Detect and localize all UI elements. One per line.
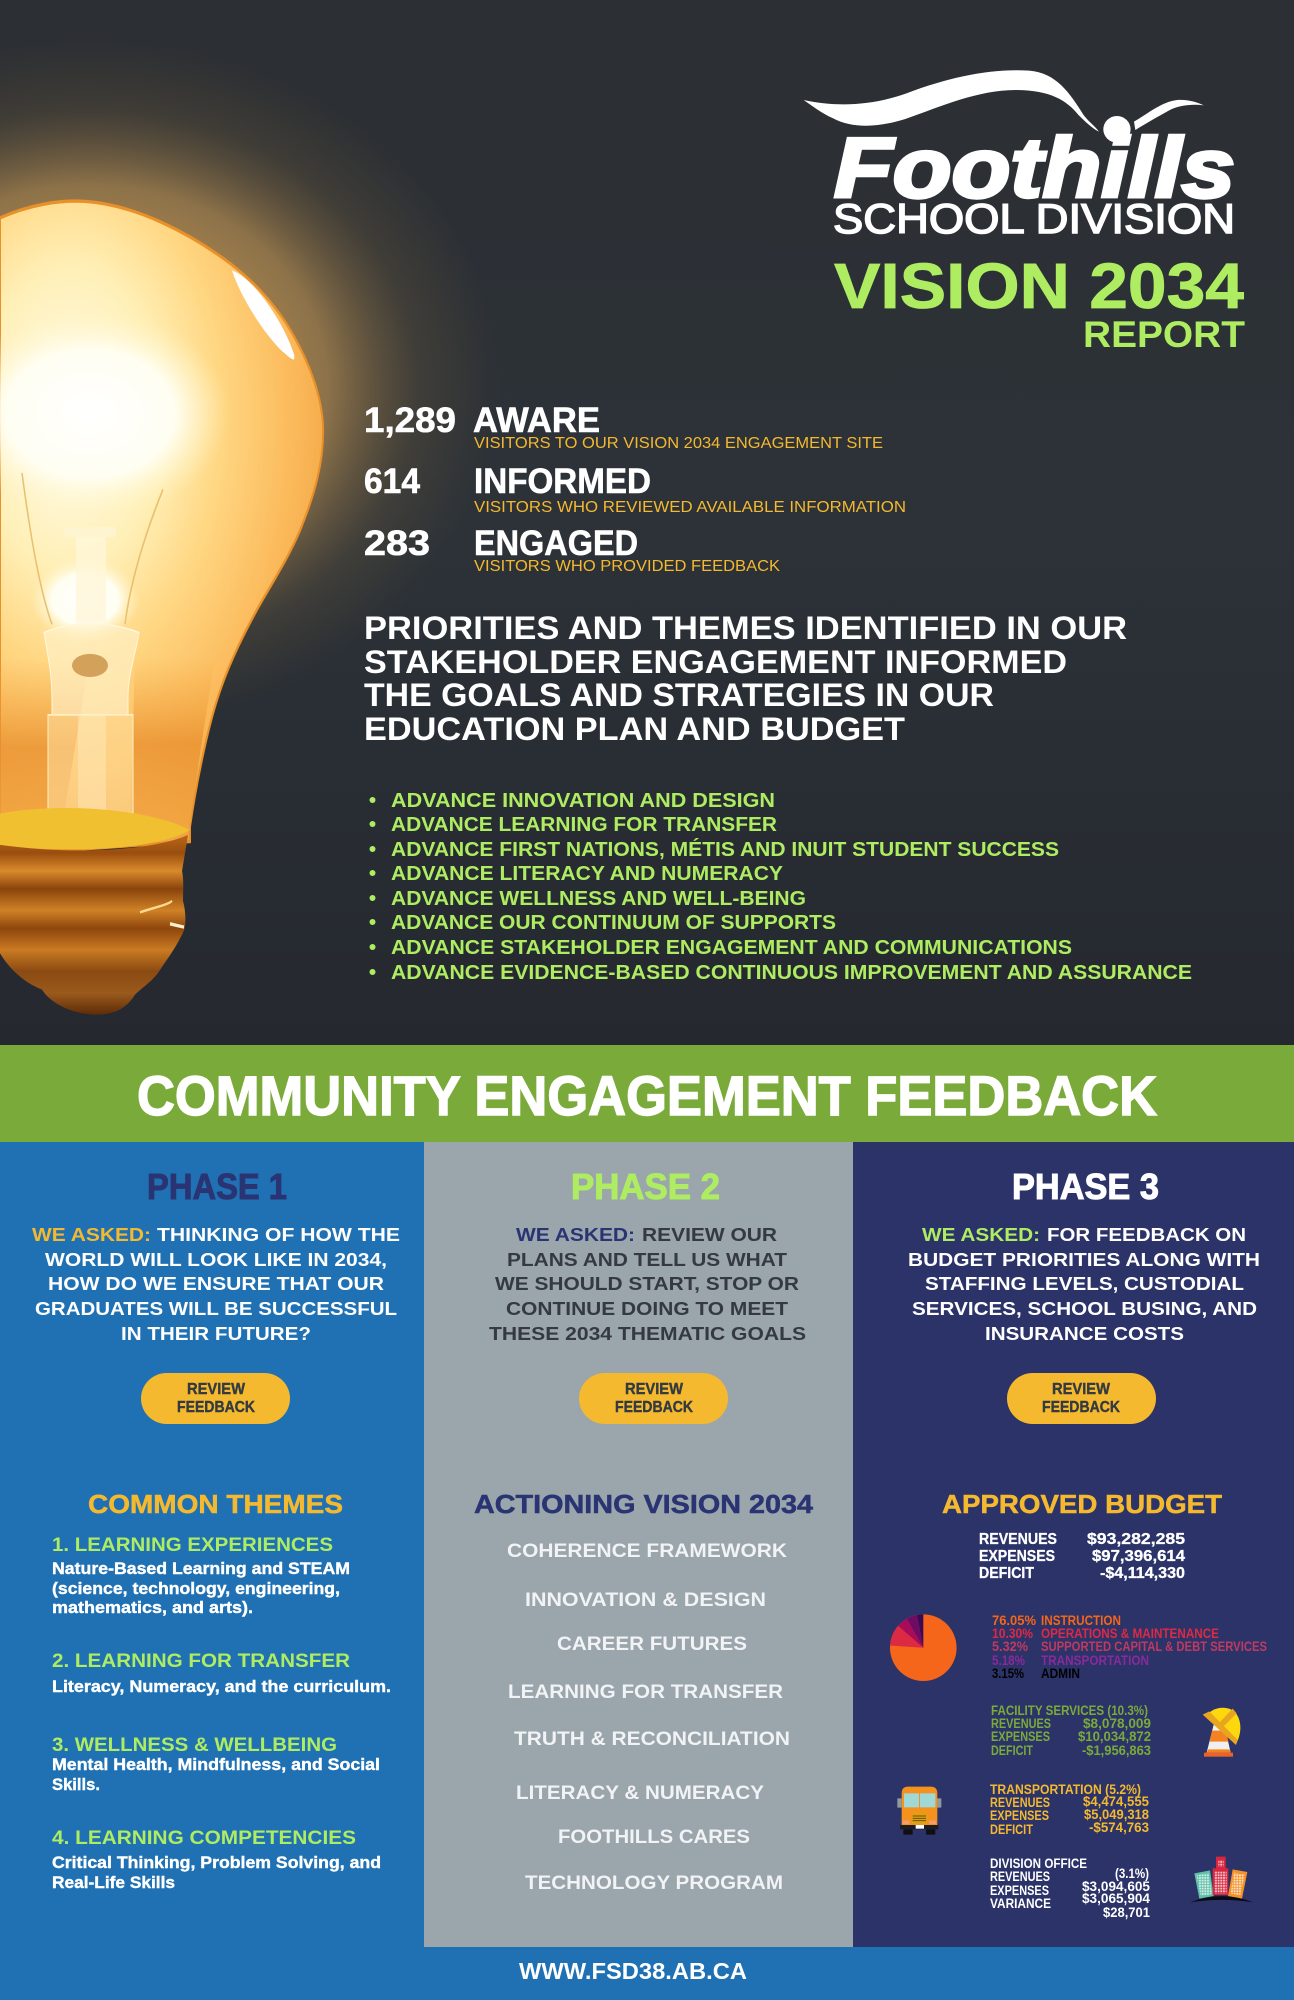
legend: budget allocation: 3.15% [992, 1666, 1024, 1681]
heading: priorities and themes: STAKEHOLDER ENGAGEMENT INFORMED [364, 644, 1067, 680]
title: Vision 2034: VISION 2034 [834, 250, 1244, 322]
theme 1 [52, 1535, 350, 1617]
theme 1: mathematics, and arts). [52, 1598, 253, 1617]
list: vision 2034 actions: INNOVATION & DESIGN [525, 1590, 766, 1611]
pie chart: budget allocation [890, 1614, 957, 1681]
table: division office: (3.1%) [1115, 1866, 1149, 1881]
stat: informed [364, 462, 906, 516]
text: phase 2 question: REVIEW OUR [642, 1224, 777, 1245]
legend: budget allocation: OPERATIONS & MAINTENANCE [1041, 1626, 1219, 1641]
text: phase 3 question: BUDGET PRIORITIES ALONG WITH [908, 1249, 1260, 1270]
theme 3: Skills. [52, 1775, 100, 1794]
theme 1: (science, technology, engineering, [52, 1579, 340, 1598]
list: vision 2034 actions: COHERENCE FRAMEWORK [507, 1541, 787, 1562]
legend: budget allocation: 5.32% [992, 1639, 1028, 1654]
table: division office: VARIANCE [990, 1896, 1051, 1911]
list: advance priorities: ADVANCE WELLNESS AND WELL-BEING [391, 888, 806, 910]
panel: phase 1 [0, 1142, 424, 1948]
theme 4: Real-Life Skills [52, 1873, 175, 1892]
table: transportation: TRANSPORTATION (5.2%) [990, 1782, 1141, 1797]
list: advance priorities: ADVANCE LITERACY AND NUMERACY [391, 863, 784, 885]
text: phase 2 question: WE ASKED: [516, 1224, 635, 1245]
theme 4: 4. LEARNING COMPETENCIES [52, 1828, 356, 1849]
heading: priorities and themes: PRIORITIES AND THEMES IDENTIFIED IN OUR [364, 610, 1127, 646]
logo wordmark: Foothills [834, 121, 1235, 215]
heading: actioning vision 2034: ACTIONING VISION 2034 [474, 1489, 814, 1519]
button: review feedback [141, 1373, 290, 1424]
text: phase 2 question: CONTINUE DOING TO MEET [506, 1298, 789, 1319]
button: review feedback: REVIEW [625, 1381, 684, 1398]
text: phase 3 question: STAFFING LEVELS, CUSTODIAL [925, 1273, 1244, 1294]
stat: engaged: ENGAGED [474, 524, 638, 563]
table: transportation: EXPENSES [990, 1808, 1049, 1823]
table: facility services: DEFICIT [991, 1743, 1034, 1758]
table: budget totals [979, 1531, 1185, 1582]
theme 3 [52, 1735, 380, 1794]
stat: engaged [364, 524, 780, 575]
list: advance priorities: ADVANCE INNOVATION AND DESIGN [391, 790, 775, 812]
stats: engagement numbers [364, 401, 906, 575]
table: facility services: REVENUES [991, 1716, 1051, 1731]
table: division office: DIVISION OFFICE [990, 1856, 1087, 1871]
text: phase 3 question [908, 1224, 1260, 1344]
theme 3: 3. WELLNESS & WELLBEING [52, 1735, 337, 1756]
logo subtitle: SCHOOL DIVISION [833, 195, 1235, 242]
legend: budget allocation [992, 1613, 1267, 1681]
panel: phase 2 [424, 1142, 853, 1948]
heading: phase 1: PHASE 1 [147, 1166, 287, 1207]
legend: budget allocation: 5.18% [992, 1653, 1025, 1668]
legend: budget allocation: 76.05% [992, 1613, 1036, 1628]
heading: phase 2: PHASE 2 [571, 1166, 720, 1207]
stat: engaged: VISITORS WHO PROVIDED FEEDBACK [474, 558, 780, 575]
theme 2 [52, 1651, 391, 1696]
button: review feedback [1007, 1373, 1156, 1424]
list: vision 2034 actions: TRUTH & RECONCILIATION [514, 1729, 790, 1750]
button: review feedback: FEEDBACK [1042, 1399, 1120, 1416]
banner: community engagement feedback [0, 1045, 1294, 1142]
table: transportation: $5,049,318 [1084, 1807, 1149, 1822]
list: vision 2034 actions: LEARNING FOR TRANSFER [508, 1682, 783, 1703]
table: budget totals: $97,396,614 [1092, 1548, 1185, 1565]
table: division office: $28,701 [1103, 1905, 1150, 1920]
table: budget totals: EXPENSES [979, 1548, 1055, 1565]
list: advance priorities: ADVANCE STAKEHOLDER ENGAGEMENT AND COMMUNICATIONS [391, 937, 1072, 959]
table: budget totals: $93,282,285 [1087, 1531, 1185, 1548]
table: division office: EXPENSES [990, 1883, 1049, 1898]
list: advance priorities [370, 790, 1192, 984]
legend: budget allocation: INSTRUCTION [1041, 1613, 1121, 1628]
table: transportation [990, 1782, 1149, 1837]
heading: approved budget: APPROVED BUDGET [942, 1489, 1222, 1519]
button: review feedback: FEEDBACK [615, 1399, 693, 1416]
stat: aware: AWARE [473, 401, 600, 440]
text: phase 3 question: INSURANCE COSTS [985, 1323, 1184, 1344]
stat: informed: 614 [364, 462, 421, 501]
logo swoosh [804, 70, 1204, 143]
heading: phase 3: PHASE 3 [1012, 1166, 1159, 1207]
legend: budget allocation: TRANSPORTATION [1041, 1653, 1149, 1668]
list: advance priorities: ADVANCE OUR CONTINUUM OF SUPPORTS [391, 912, 836, 934]
icon: hard hat and traffic cone [1203, 1708, 1240, 1757]
panel: phase 3 [853, 1142, 1294, 1948]
theme 4 [52, 1828, 381, 1892]
list: advance priorities: ADVANCE LEARNING FOR TRANSFER [391, 814, 778, 836]
icon: office buildings [1190, 1857, 1253, 1902]
table: division office: $3,094,605 [1082, 1879, 1150, 1894]
text: phase 2 question: THESE 2034 THEMATIC GOALS [489, 1323, 806, 1344]
stat: informed: INFORMED [474, 462, 651, 501]
table: division office: REVENUES [990, 1869, 1050, 1884]
table: facility services: $10,034,872 [1078, 1729, 1151, 1744]
text: phase 3 question: SERVICES, SCHOOL BUSING, AND [912, 1298, 1257, 1319]
panel: chalkboard background [0, 0, 1294, 1046]
heading: priorities and themes: THE GOALS AND STRATEGIES IN OUR [364, 677, 994, 713]
list: advance priorities: ADVANCE FIRST NATIONS, MÉTIS AND INUIT STUDENT SUCCESS [391, 838, 1059, 861]
heading: common themes: COMMON THEMES [88, 1489, 343, 1519]
subtitle: Report: REPORT [1083, 314, 1245, 355]
text: phase 2 question: WE SHOULD START, STOP OR [495, 1273, 799, 1294]
table: facility services: FACILITY SERVICES (10.3%) [991, 1703, 1148, 1718]
text: phase 1 question [32, 1224, 400, 1344]
text: phase 1 question: WE ASKED: [32, 1224, 151, 1245]
text: phase 1 question: GRADUATES WILL BE SUCCESSFUL [35, 1298, 397, 1319]
banner: community engagement feedback: COMMUNITY ENGAGEMENT FEEDBACK [137, 1064, 1157, 1127]
table: transportation: -$574,763 [1089, 1820, 1149, 1835]
text: phase 3 question: WE ASKED: [922, 1224, 1040, 1245]
theme 1: 1. LEARNING EXPERIENCES [52, 1535, 333, 1556]
text: phase 2 question: PLANS AND TELL US WHAT [507, 1249, 788, 1270]
table: facility services: $8,078,009 [1083, 1716, 1151, 1731]
logo: Foothills School Division [804, 70, 1235, 242]
button: review feedback: FEEDBACK [177, 1399, 255, 1416]
heading: priorities and themes [364, 610, 1127, 747]
table: transportation: DEFICIT [990, 1822, 1034, 1837]
stat: engaged: 283 [364, 524, 430, 563]
footer: website: WWW.FSD38.AB.CA [519, 1958, 747, 1984]
table: facility services: EXPENSES [991, 1729, 1050, 1744]
list: advance priorities: ADVANCE EVIDENCE-BASED CONTINUOUS IMPROVEMENT AND ASSURANCE [391, 962, 1192, 984]
table: budget totals: DEFICIT [979, 1565, 1034, 1582]
glow around light bulb [0, 0, 560, 800]
button: review feedback: REVIEW [187, 1381, 246, 1398]
icon: school bus [897, 1787, 941, 1835]
list: vision 2034 actions: FOOTHILLS CARES [558, 1827, 750, 1848]
heading: priorities and themes: EDUCATION PLAN AND BUDGET [364, 711, 905, 747]
stat: informed: VISITORS WHO REVIEWED AVAILABLE INFORMATION [474, 499, 906, 516]
list: vision 2034 actions: CAREER FUTURES [557, 1634, 747, 1655]
list: vision 2034 actions [507, 1541, 790, 1894]
legend: budget allocation: ADMIN [1041, 1666, 1080, 1681]
stat: aware [364, 401, 883, 452]
table: facility services [991, 1703, 1151, 1758]
table: division office [990, 1856, 1150, 1920]
text: phase 2 question [489, 1224, 806, 1344]
table: transportation: $4,474,555 [1083, 1794, 1149, 1809]
button: review feedback: REVIEW [1052, 1381, 1111, 1398]
table: budget totals: -$4,114,330 [1100, 1565, 1185, 1582]
theme 4: Critical Thinking, Problem Solving, and [52, 1853, 381, 1872]
table: facility services: -$1,956,863 [1082, 1743, 1151, 1758]
table: transportation: REVENUES [990, 1795, 1050, 1810]
stat: aware: VISITORS TO OUR VISION 2034 ENGAGEMENT SITE [474, 435, 883, 452]
text: phase 1 question: WORLD WILL LOOK LIKE IN 2034, [45, 1249, 387, 1270]
theme 3: Mental Health, Mindfulness, and Social [52, 1755, 380, 1774]
text: phase 1 question: HOW DO WE ENSURE THAT OUR [48, 1273, 384, 1294]
legend: budget allocation: 10.30% [992, 1626, 1033, 1641]
text: phase 1 question: THINKING OF HOW THE [157, 1224, 400, 1245]
list: vision 2034 actions: TECHNOLOGY PROGRAM [525, 1873, 783, 1894]
theme 2: 2. LEARNING FOR TRANSFER [52, 1651, 350, 1672]
text: phase 1 question: IN THEIR FUTURE? [121, 1323, 311, 1344]
text: phase 3 question: FOR FEEDBACK ON [1047, 1224, 1246, 1245]
icon: glowing light bulb [0, 201, 323, 1015]
table: budget totals: REVENUES [979, 1531, 1057, 1548]
button: review feedback [579, 1373, 728, 1424]
footer: website [0, 1947, 1294, 2000]
stat: aware: 1,289 [364, 401, 456, 440]
table: division office: $3,065,904 [1082, 1891, 1150, 1906]
theme 1: Nature-Based Learning and STEAM [52, 1559, 350, 1578]
theme 2: Literacy, Numeracy, and the curriculum. [52, 1677, 391, 1696]
list: vision 2034 actions: LITERACY & NUMERACY [516, 1783, 764, 1804]
